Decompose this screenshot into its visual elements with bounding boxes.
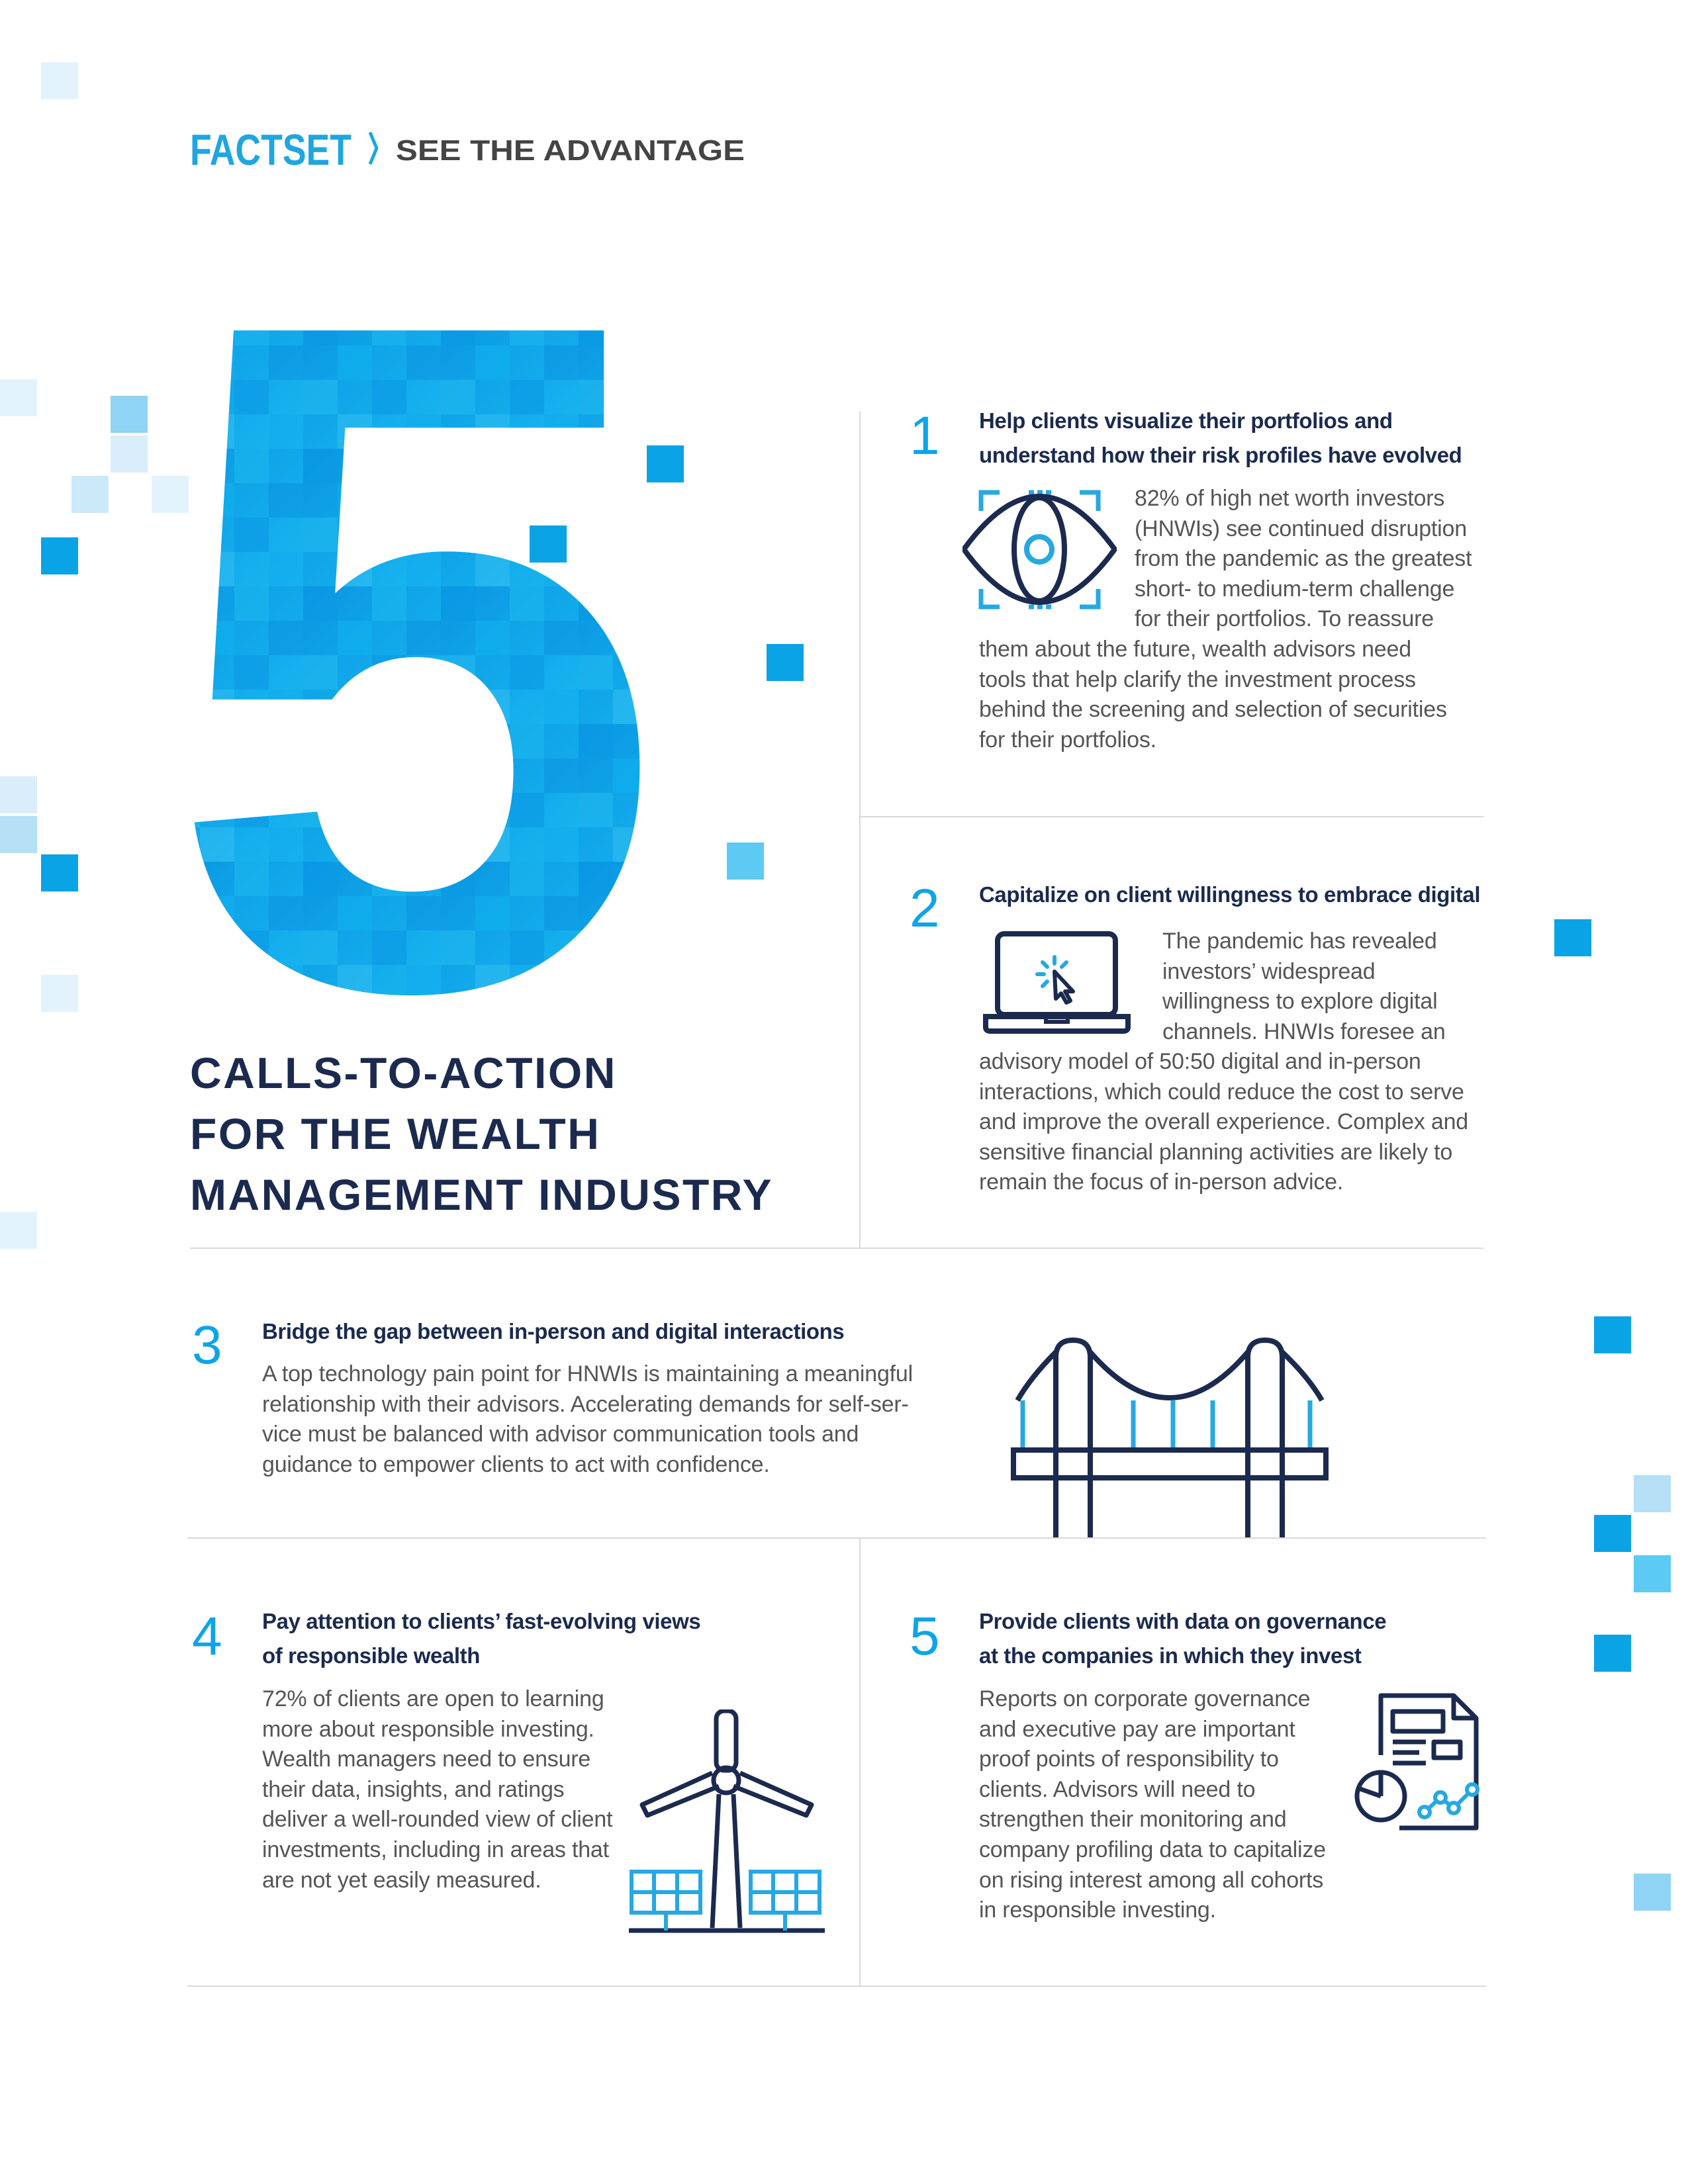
heading 3: Bridge the gap between in-person and digital interactions — [262, 1319, 844, 1343]
panel 1: behind the screening and selection of securities — [979, 697, 1447, 722]
body 1 — [1135, 486, 1472, 631]
title — [190, 1048, 773, 1219]
body 5: strengthen their monitoring and — [979, 1807, 1286, 1832]
body 2: willingness to explore digital — [1162, 989, 1437, 1014]
number 1: 1 — [910, 406, 940, 466]
icon: governance document — [1354, 1693, 1479, 1831]
body 4: are not yet easily measured. — [262, 1868, 541, 1893]
body 5: and executive pay are important — [979, 1717, 1295, 1742]
title: MANAGEMENT INDUSTRY — [190, 1170, 773, 1219]
body 4: more about responsible investing. — [262, 1717, 594, 1742]
panel 1: tools that help clarify the investment process — [979, 667, 1416, 692]
body 3: relationship with their advisors. Accelerating demands for self-ser- — [262, 1392, 909, 1417]
body 1: (HNWIs) see continued disruption — [1135, 516, 1467, 541]
body 5: clients. Advisors will need to — [979, 1777, 1255, 1802]
body 1: from the pandemic as the greatest — [1135, 546, 1472, 571]
icon: eye — [962, 490, 1117, 609]
title: FOR THE WEALTH — [190, 1109, 600, 1158]
body 4: 72% of clients are open to learning — [262, 1686, 604, 1711]
icon: laptop — [983, 931, 1131, 1034]
body 1: 82% of high net worth investors — [1135, 486, 1444, 511]
body 2: The pandemic has revealed — [1162, 929, 1437, 954]
body 5: in responsible investing. — [979, 1897, 1216, 1923]
body 5: proof points of responsibility to — [979, 1747, 1279, 1772]
body 1: for their portfolios. To reassure — [1135, 606, 1434, 631]
panel 2: interactions, which could reduce the cost to serve — [979, 1079, 1464, 1105]
panel 2: advisory model of 50:50 digital and in-person — [979, 1049, 1421, 1074]
body 1: short- to medium-term challenge — [1135, 576, 1454, 602]
body 5: Reports on corporate governance — [979, 1686, 1310, 1711]
icon: wind turbine and solar — [629, 1709, 825, 1933]
body 4: their data, insights, and ratings — [262, 1777, 564, 1802]
icon: bridge — [1011, 1338, 1329, 1537]
panel 1: them about the future, wealth advisors need — [979, 637, 1411, 662]
body 2: channels. HNWIs foresee an — [1162, 1019, 1446, 1044]
logo header: SEE THE ADVANTAGE — [396, 134, 745, 167]
body 3 — [262, 1361, 913, 1477]
panel 2: sensitive financial planning activities are likely to — [979, 1140, 1452, 1165]
number 5: 5 — [910, 1606, 940, 1666]
body 5 — [979, 1686, 1326, 1923]
title: CALLS-TO-ACTION — [190, 1048, 617, 1097]
body 3: vice must be balanced with advisor communication tools and — [262, 1422, 859, 1447]
heading 2: Capitalize on client willingness to embrace digital — [979, 882, 1480, 907]
panel 2: and improve the overall experience. Complex and — [979, 1109, 1468, 1134]
body 2: investors’ widespread — [1162, 959, 1375, 984]
panel 4 — [192, 1606, 700, 1893]
number 3: 3 — [192, 1315, 222, 1375]
heading 5: at the companies in which they invest — [979, 1643, 1362, 1668]
heading 5 — [979, 1609, 1386, 1668]
body 3: guidance to empower clients to act with confidence. — [262, 1452, 770, 1477]
body 4: Wealth managers need to ensure — [262, 1747, 590, 1772]
heading 1 — [979, 408, 1462, 467]
heading 1: understand how their risk profiles have evolved — [979, 443, 1462, 467]
panel 1: for their portfolios. — [979, 727, 1156, 752]
heading 4: of responsible wealth — [262, 1643, 480, 1668]
body 3: A top technology pain point for HNWIs is maintaining a meaningful — [262, 1361, 913, 1387]
panel 2: remain the focus of in-person advice. — [979, 1169, 1343, 1195]
number 4: 4 — [192, 1606, 222, 1666]
heading 4 — [262, 1609, 700, 1668]
body 5: company profiling data to capitalize — [979, 1837, 1326, 1862]
number 2: 2 — [910, 878, 940, 938]
body 2 — [1162, 929, 1446, 1044]
panel 2 — [910, 878, 1480, 1195]
logo header — [190, 126, 745, 172]
panel 5 — [910, 1606, 1386, 1923]
heading 4: Pay attention to clients’ fast-evolving views — [262, 1609, 700, 1633]
panel 1 — [910, 406, 1472, 752]
body 5: on rising interest among all cohorts — [979, 1868, 1323, 1893]
panel 3 — [192, 1315, 913, 1477]
heading 5: Provide clients with data on governance — [979, 1609, 1386, 1633]
body 4: investments, including in areas that — [262, 1837, 609, 1862]
heading 1: Help clients visualize their portfolios and — [979, 408, 1393, 433]
body 4 — [262, 1686, 613, 1893]
body 4: deliver a well-rounded view of client — [262, 1807, 612, 1832]
